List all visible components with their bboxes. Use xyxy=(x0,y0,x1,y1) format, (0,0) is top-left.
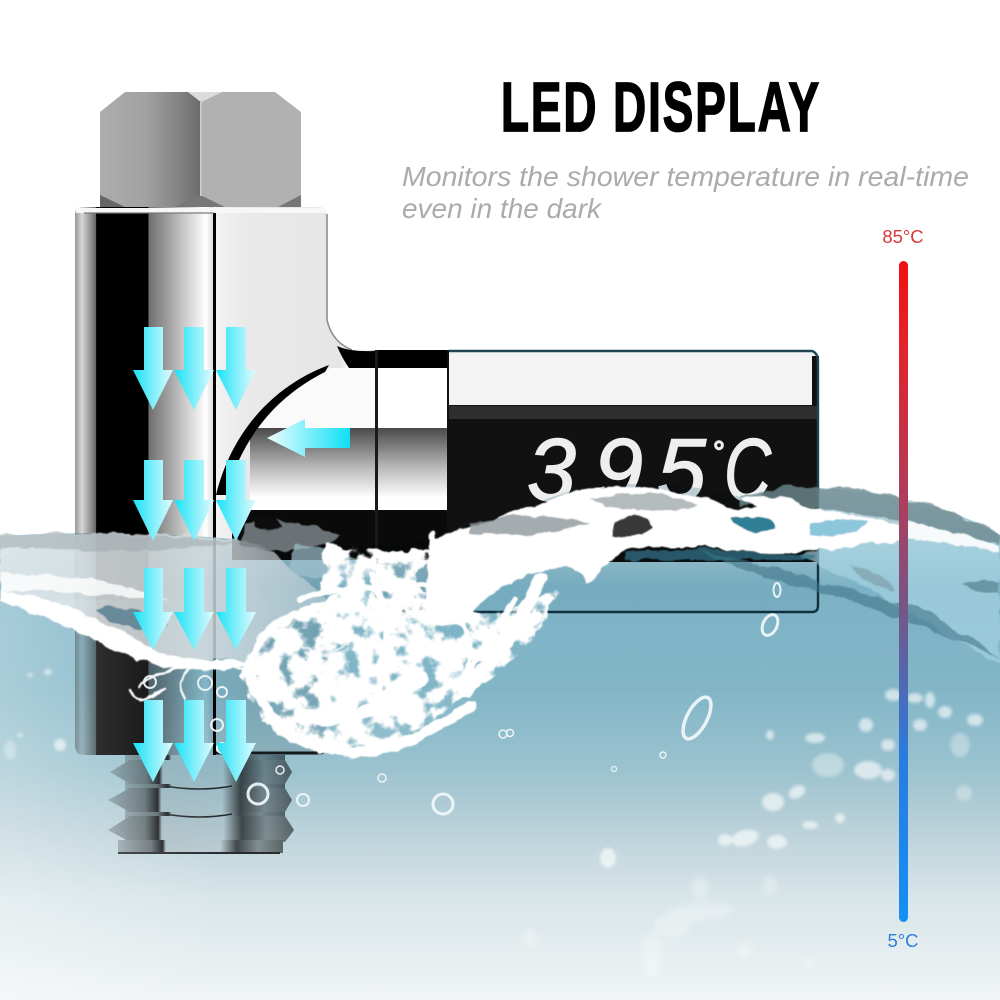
faucet body xyxy=(75,207,376,755)
LED temperature readout: ° xyxy=(713,436,725,469)
hex nut xyxy=(100,92,301,207)
surface swirls over dark housing xyxy=(240,517,372,579)
LED temperature readout: 39.5 xyxy=(527,420,707,519)
title: LED DISPLAY xyxy=(501,68,821,146)
water body xyxy=(0,484,1000,1000)
foam strokes xyxy=(130,535,540,752)
subtitle: even in the dark xyxy=(402,193,603,224)
subtitle: Monitors the shower temperature in real-time xyxy=(402,161,969,192)
subtitle xyxy=(402,161,969,224)
low temperature label: 5°C xyxy=(887,930,919,951)
foam cascade xyxy=(241,545,560,758)
LED display housing xyxy=(449,350,819,613)
left light wash xyxy=(0,600,220,1000)
ring bubbles xyxy=(144,583,781,814)
LED temperature readout: C xyxy=(724,422,772,519)
main wave crest foam xyxy=(426,488,1000,626)
thread fitting xyxy=(108,755,294,854)
bottom splash xyxy=(523,875,816,977)
soft bubble clusters xyxy=(4,669,983,868)
elbow pipe and collar xyxy=(216,346,450,612)
arrows down xyxy=(133,327,256,782)
water surface film xyxy=(0,534,330,669)
arrow left xyxy=(267,419,350,457)
temperature scale bar xyxy=(899,261,908,922)
right surface tint and water streaks xyxy=(625,486,1000,665)
high temperature label: 85°C xyxy=(882,226,924,247)
